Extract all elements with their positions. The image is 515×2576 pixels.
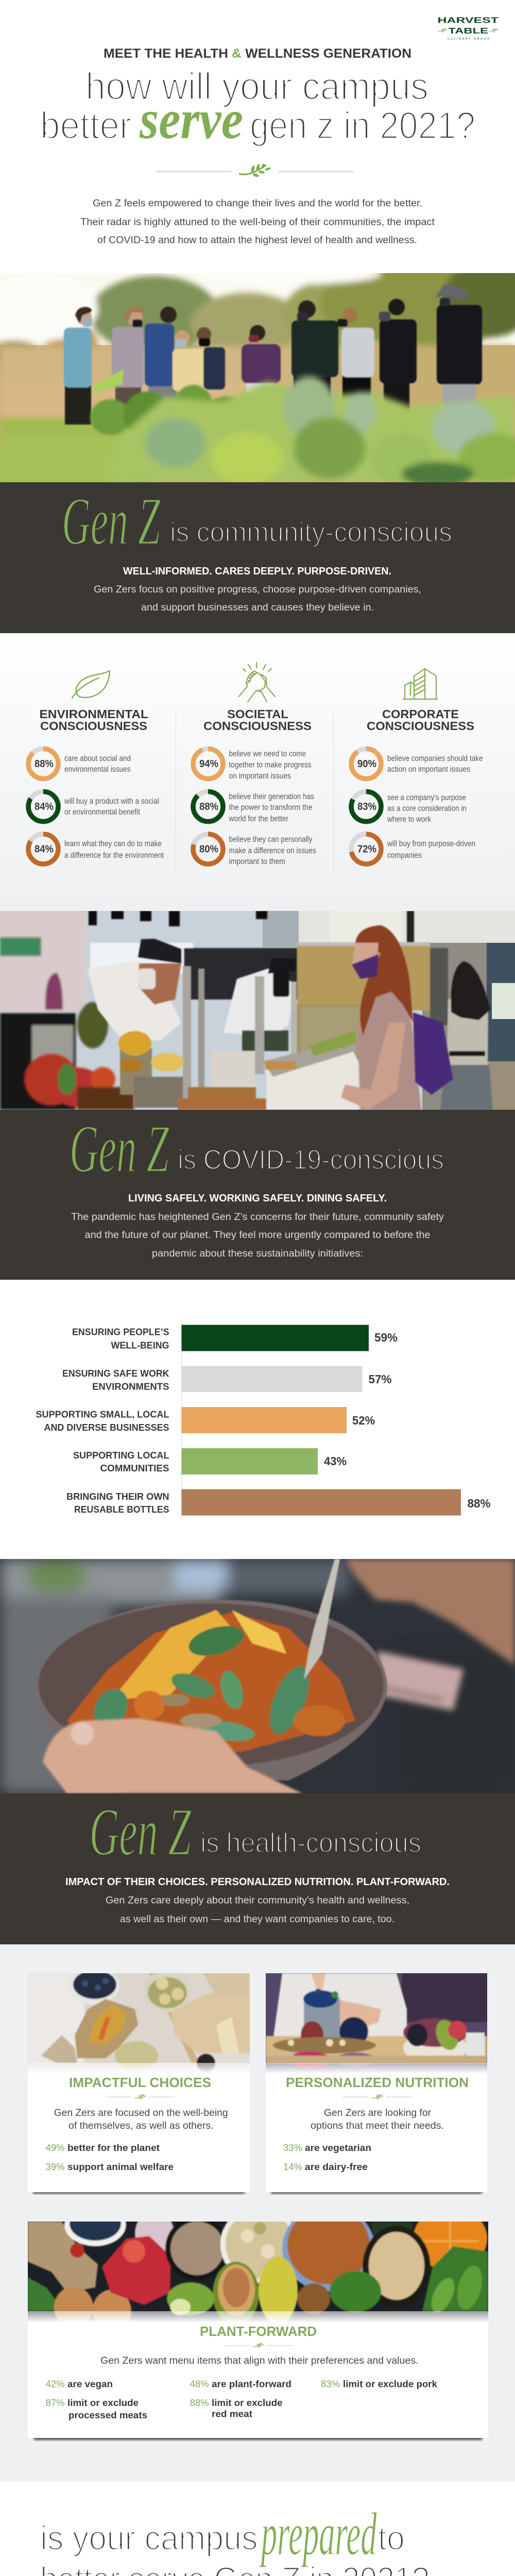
heading: environmental: CONSCIOUSNESS — [40, 719, 147, 733]
bar: reusable bottles: REUSABLE BOTTLES — [74, 1504, 169, 1515]
stat text: 84% — [35, 801, 54, 812]
stat text: 88% — [199, 801, 218, 812]
stat text: important to them — [229, 857, 285, 866]
stat text: companies — [387, 851, 422, 860]
photo: students in garden — [0, 273, 515, 482]
heading: societal — [203, 707, 312, 733]
stat lines — [283, 2142, 371, 2172]
panel: community-conscious banner — [0, 482, 515, 633]
stat text: learn what they can do to make — [64, 840, 162, 848]
text block: options that meet their needs. — [311, 2121, 444, 2131]
panel: COVID-19-conscious banner — [0, 1110, 515, 1280]
intro paragraph: Their radar is highly attuned to the well-being of their communities, the impact — [80, 217, 435, 228]
stat lines — [46, 2142, 174, 2172]
tagline: IMPACT OF THEIR CHOICES. PERSONALIZED NUTRITION. PLANT-FORWARD. — [65, 1876, 450, 1888]
bar: people's well-being: 59% — [374, 1331, 398, 1344]
text block — [94, 584, 421, 613]
donut stat: 84 learn — [28, 834, 58, 864]
stat text: will buy from purpose-driven — [387, 840, 475, 848]
stat lines: better for the planet — [67, 2142, 160, 2153]
heading: environmental: ENVIRONMENTAL — [39, 707, 148, 721]
stat lines: are dairy-free — [305, 2161, 368, 2172]
stat text — [357, 754, 483, 774]
stat text: 90% — [357, 758, 376, 770]
stat text: 94% — [199, 758, 218, 770]
out of focus foreground leaves — [0, 438, 124, 484]
text block: and the future of our planet. They feel more urgently compared to before the — [84, 1230, 431, 1241]
title: serve — [139, 89, 243, 150]
text block: Gen Zers are focused on the well-being — [54, 2108, 228, 2119]
bar: local communities: SUPPORTING LOCAL — [73, 1450, 169, 1461]
heading: Gen Z is health-conscious: Gen Z — [90, 1794, 192, 1870]
counter — [266, 1046, 358, 1110]
people — [65, 385, 91, 425]
stat lines: 88% — [190, 2397, 209, 2408]
stat lines: red meat — [212, 2408, 252, 2419]
stat text: 83% — [357, 801, 376, 812]
heading: societal: CONSCIOUSNESS — [203, 719, 312, 733]
stat text: make a difference on issues — [229, 846, 316, 855]
heading: Gen Z is health-conscious: is health-conscious — [200, 1827, 421, 1858]
tagline: LIVING SAFELY. WORKING SAFELY. DINING SAFELY. — [128, 1193, 387, 1204]
stat lines: support animal welfare — [67, 2161, 174, 2172]
bar: local communities: 43% — [324, 1454, 347, 1468]
stat text: world for the better — [229, 815, 288, 823]
donut stat: 80 — [193, 834, 223, 864]
textured background — [0, 1944, 515, 2482]
stat lines: limit or exclude pork — [343, 2378, 438, 2389]
text block: of themselves, as well as others. — [68, 2121, 213, 2131]
stat text — [35, 754, 131, 774]
tagline: WELL-INFORMED. CARES DEEPLY. PURPOSE-DRIVEN. — [123, 566, 391, 577]
bar: safe work — [62, 1366, 391, 1392]
heading: PERSONALIZED NUTRITION — [286, 2075, 469, 2090]
stat lines: 42% — [46, 2378, 65, 2389]
title: how will your campus — [85, 65, 428, 108]
stat text — [199, 750, 312, 781]
stat lines: are vegetarian — [305, 2142, 371, 2153]
photo: grain bowl — [0, 1559, 515, 1793]
text block: Gen Zers are looking for — [324, 2108, 432, 2119]
heading: Gen Z is community-conscious: is community-conscious — [170, 517, 452, 548]
text block: and support businesses and causes they believe in. — [141, 602, 374, 613]
bar: safe work: 57% — [369, 1372, 391, 1386]
stat text — [35, 840, 164, 860]
stat text — [199, 792, 314, 823]
photo: dining hall serving line — [0, 911, 515, 1110]
stat lines — [46, 2378, 438, 2420]
intro paragraph: of COVID-19 and how to attain the highest level of health and wellness. — [97, 235, 417, 246]
heading: corporate: CORPORATE — [382, 707, 459, 721]
intro paragraph: Gen Z feels empowered to change their lives and the world for the better. — [93, 198, 422, 209]
icon: office buildings — [403, 669, 438, 699]
bar chart: sustainability initiatives — [36, 1321, 490, 1521]
donut stat: 83 — [351, 791, 381, 821]
intro paragraph — [80, 198, 435, 246]
heading: Gen Z is community-conscious — [62, 483, 452, 559]
bar: people's well-being — [72, 1325, 398, 1351]
stat lines: limit or exclude — [212, 2397, 282, 2408]
text block — [71, 1212, 444, 1259]
heading: societal: SOCIETAL — [227, 707, 288, 721]
popcorn cans — [120, 1048, 152, 1095]
bar: reusable bottles: BRINGING THEIR OWN — [66, 1492, 169, 1502]
photo: plant foods flat lay — [28, 2222, 488, 2321]
divider with sprig — [106, 2094, 175, 2099]
title — [40, 65, 475, 150]
heading: environmental — [39, 707, 148, 733]
stat text: as a core consideration in — [387, 804, 467, 813]
text block: Gen Zers focus on positive progress, choose purpose-driven companies, — [94, 584, 421, 595]
heading: Gen Z is COVID-19-conscious — [70, 1111, 444, 1187]
stat lines: 83% — [321, 2378, 340, 2389]
divider with sprig — [224, 2343, 293, 2348]
stat text — [199, 835, 316, 866]
stat text: or environmental benefit — [64, 808, 141, 817]
heading: Gen Z is COVID-19-conscious: Gen Z — [70, 1111, 169, 1187]
stat lines: 48% — [190, 2378, 209, 2389]
divider with sprig — [156, 163, 353, 178]
panel: three consciousness columns — [0, 633, 515, 911]
panel: health-conscious banner — [0, 1793, 515, 1944]
panel: personalized nutrition card — [266, 1973, 487, 2194]
stat text — [357, 840, 475, 860]
text block — [311, 2108, 444, 2131]
bar: people's well-being: WELL-BEING — [111, 1341, 169, 1351]
panel: plant-forward card — [28, 2203, 488, 2440]
heading: PLANT-FORWARD — [200, 2324, 317, 2339]
donut stat: 88 — [193, 791, 223, 821]
donut stat: 88 care about social — [28, 749, 58, 779]
text block: The pandemic has heightened Gen Z’s concerns for their future, community safety — [71, 1212, 444, 1223]
heading: is your campus prepared — [40, 2500, 430, 2576]
logo: Harvest Table header: HARVEST — [438, 16, 499, 25]
stat text: believe their generation has — [229, 792, 314, 801]
text block: as well as their own — and they want companies to care, too. — [120, 1914, 394, 1925]
stat text: the power to transform the — [229, 803, 312, 812]
bar: safe work: ENSURING SAFE WORK — [62, 1368, 169, 1379]
bar: local communities — [73, 1448, 347, 1475]
stat text: on important issues — [229, 772, 291, 781]
chef one — [88, 960, 181, 1041]
divider with sprig — [342, 2094, 412, 2099]
stat text: care about social and — [64, 754, 131, 763]
bar: small local businesses — [36, 1407, 375, 1433]
panel: impactful choices card — [28, 1968, 250, 2194]
student with purple backpack — [440, 1065, 493, 1110]
stat text: believe we need to come — [229, 750, 306, 758]
stat lines: limit or exclude — [67, 2397, 139, 2408]
stat text: believe they can personally — [229, 835, 313, 844]
bar: small local businesses: 52% — [352, 1414, 375, 1427]
heading: is your campus prepared: prepared — [259, 2500, 377, 2568]
stat lines: are plant-forward — [212, 2378, 291, 2389]
stat text: 84% — [35, 844, 54, 855]
donut stat: 90 — [351, 749, 381, 779]
stat text: action on important issues — [387, 765, 470, 774]
stat text: 88% — [35, 758, 54, 770]
heading: Gen Z is community-conscious: Gen Z — [62, 483, 161, 559]
stat text: 80% — [199, 844, 218, 855]
heading: Gen Z is health-conscious — [90, 1794, 421, 1870]
stat text — [35, 797, 159, 817]
stat text: together to make progress — [229, 760, 312, 770]
stat lines: 14% — [283, 2161, 302, 2172]
heading: corporate: CONSCIOUSNESS — [367, 719, 474, 733]
heading: IMPACTFUL CHOICES — [69, 2075, 211, 2090]
stat text: a difference for the environment — [64, 851, 164, 860]
stat text: will buy a product with a social — [64, 797, 159, 806]
stat lines: processed meats — [68, 2410, 147, 2420]
stat lines: 49% — [46, 2142, 65, 2153]
bar: reusable bottles — [66, 1489, 490, 1516]
donut stat: 84 will buy — [28, 791, 58, 821]
stat lines: 33% — [283, 2142, 302, 2153]
logo: Harvest Table header — [438, 16, 499, 41]
icon: clasped hands — [239, 663, 275, 702]
stat text: 72% — [357, 844, 376, 855]
bar: reusable bottles: 88% — [468, 1497, 490, 1510]
title: gen z in 2021? — [250, 104, 475, 147]
stat text: environmental issues — [64, 765, 131, 774]
text block — [106, 1895, 409, 1925]
heading: is your campus prepared: is your campus — [40, 2519, 258, 2557]
logo: Harvest Table header: TABLE — [448, 27, 488, 36]
kale rows — [90, 399, 131, 435]
heading: is your campus prepared: to — [378, 2519, 405, 2557]
title: better — [40, 104, 131, 147]
text block: Gen Zers care deeply about their community’s health and wellness, — [106, 1895, 409, 1906]
stat lines: are vegan — [67, 2378, 113, 2389]
icon: leaf — [72, 671, 110, 698]
photo: wraps and bowls — [28, 1973, 250, 2072]
heading: corporate — [367, 707, 474, 733]
stat lines: 87% — [46, 2397, 65, 2408]
bar: small local businesses: AND DIVERSE BUSINESSES — [44, 1422, 169, 1433]
bar: safe work: ENVIRONMENTS — [92, 1382, 169, 1392]
text block: pandemic about these sustainability initiatives: — [152, 1248, 363, 1259]
donut stat: 72 — [351, 834, 381, 864]
stat text: see a company’s purpose — [387, 793, 466, 802]
bar: local communities: COMMUNITIES — [100, 1463, 169, 1473]
stat text — [357, 793, 467, 824]
logo: Harvest Table header: CULINARY GROUP — [448, 38, 489, 41]
sneeze guard and posts — [183, 966, 191, 1108]
stat lines: 39% — [46, 2161, 65, 2172]
chef two — [224, 969, 296, 1036]
donut stat: 94 — [193, 749, 223, 779]
bar: people's well-being: ENSURING PEOPLE’S — [72, 1327, 169, 1337]
text block: Gen Zers want menu items that align with their preferences and values. — [100, 2355, 418, 2366]
stat text: where to work — [387, 815, 431, 824]
text block — [54, 2108, 228, 2131]
stat text: believe companies should take — [387, 754, 483, 763]
eyebrow heading: MEET THE HEALTH & WELLNESS GENERATION — [104, 46, 411, 61]
photo: chia jar and berries — [266, 1973, 487, 2073]
bar: small local businesses: SUPPORTING SMALL, LOCAL — [36, 1410, 169, 1420]
heading: Gen Z is COVID-19-conscious: is COVID-19-conscious — [178, 1144, 444, 1175]
